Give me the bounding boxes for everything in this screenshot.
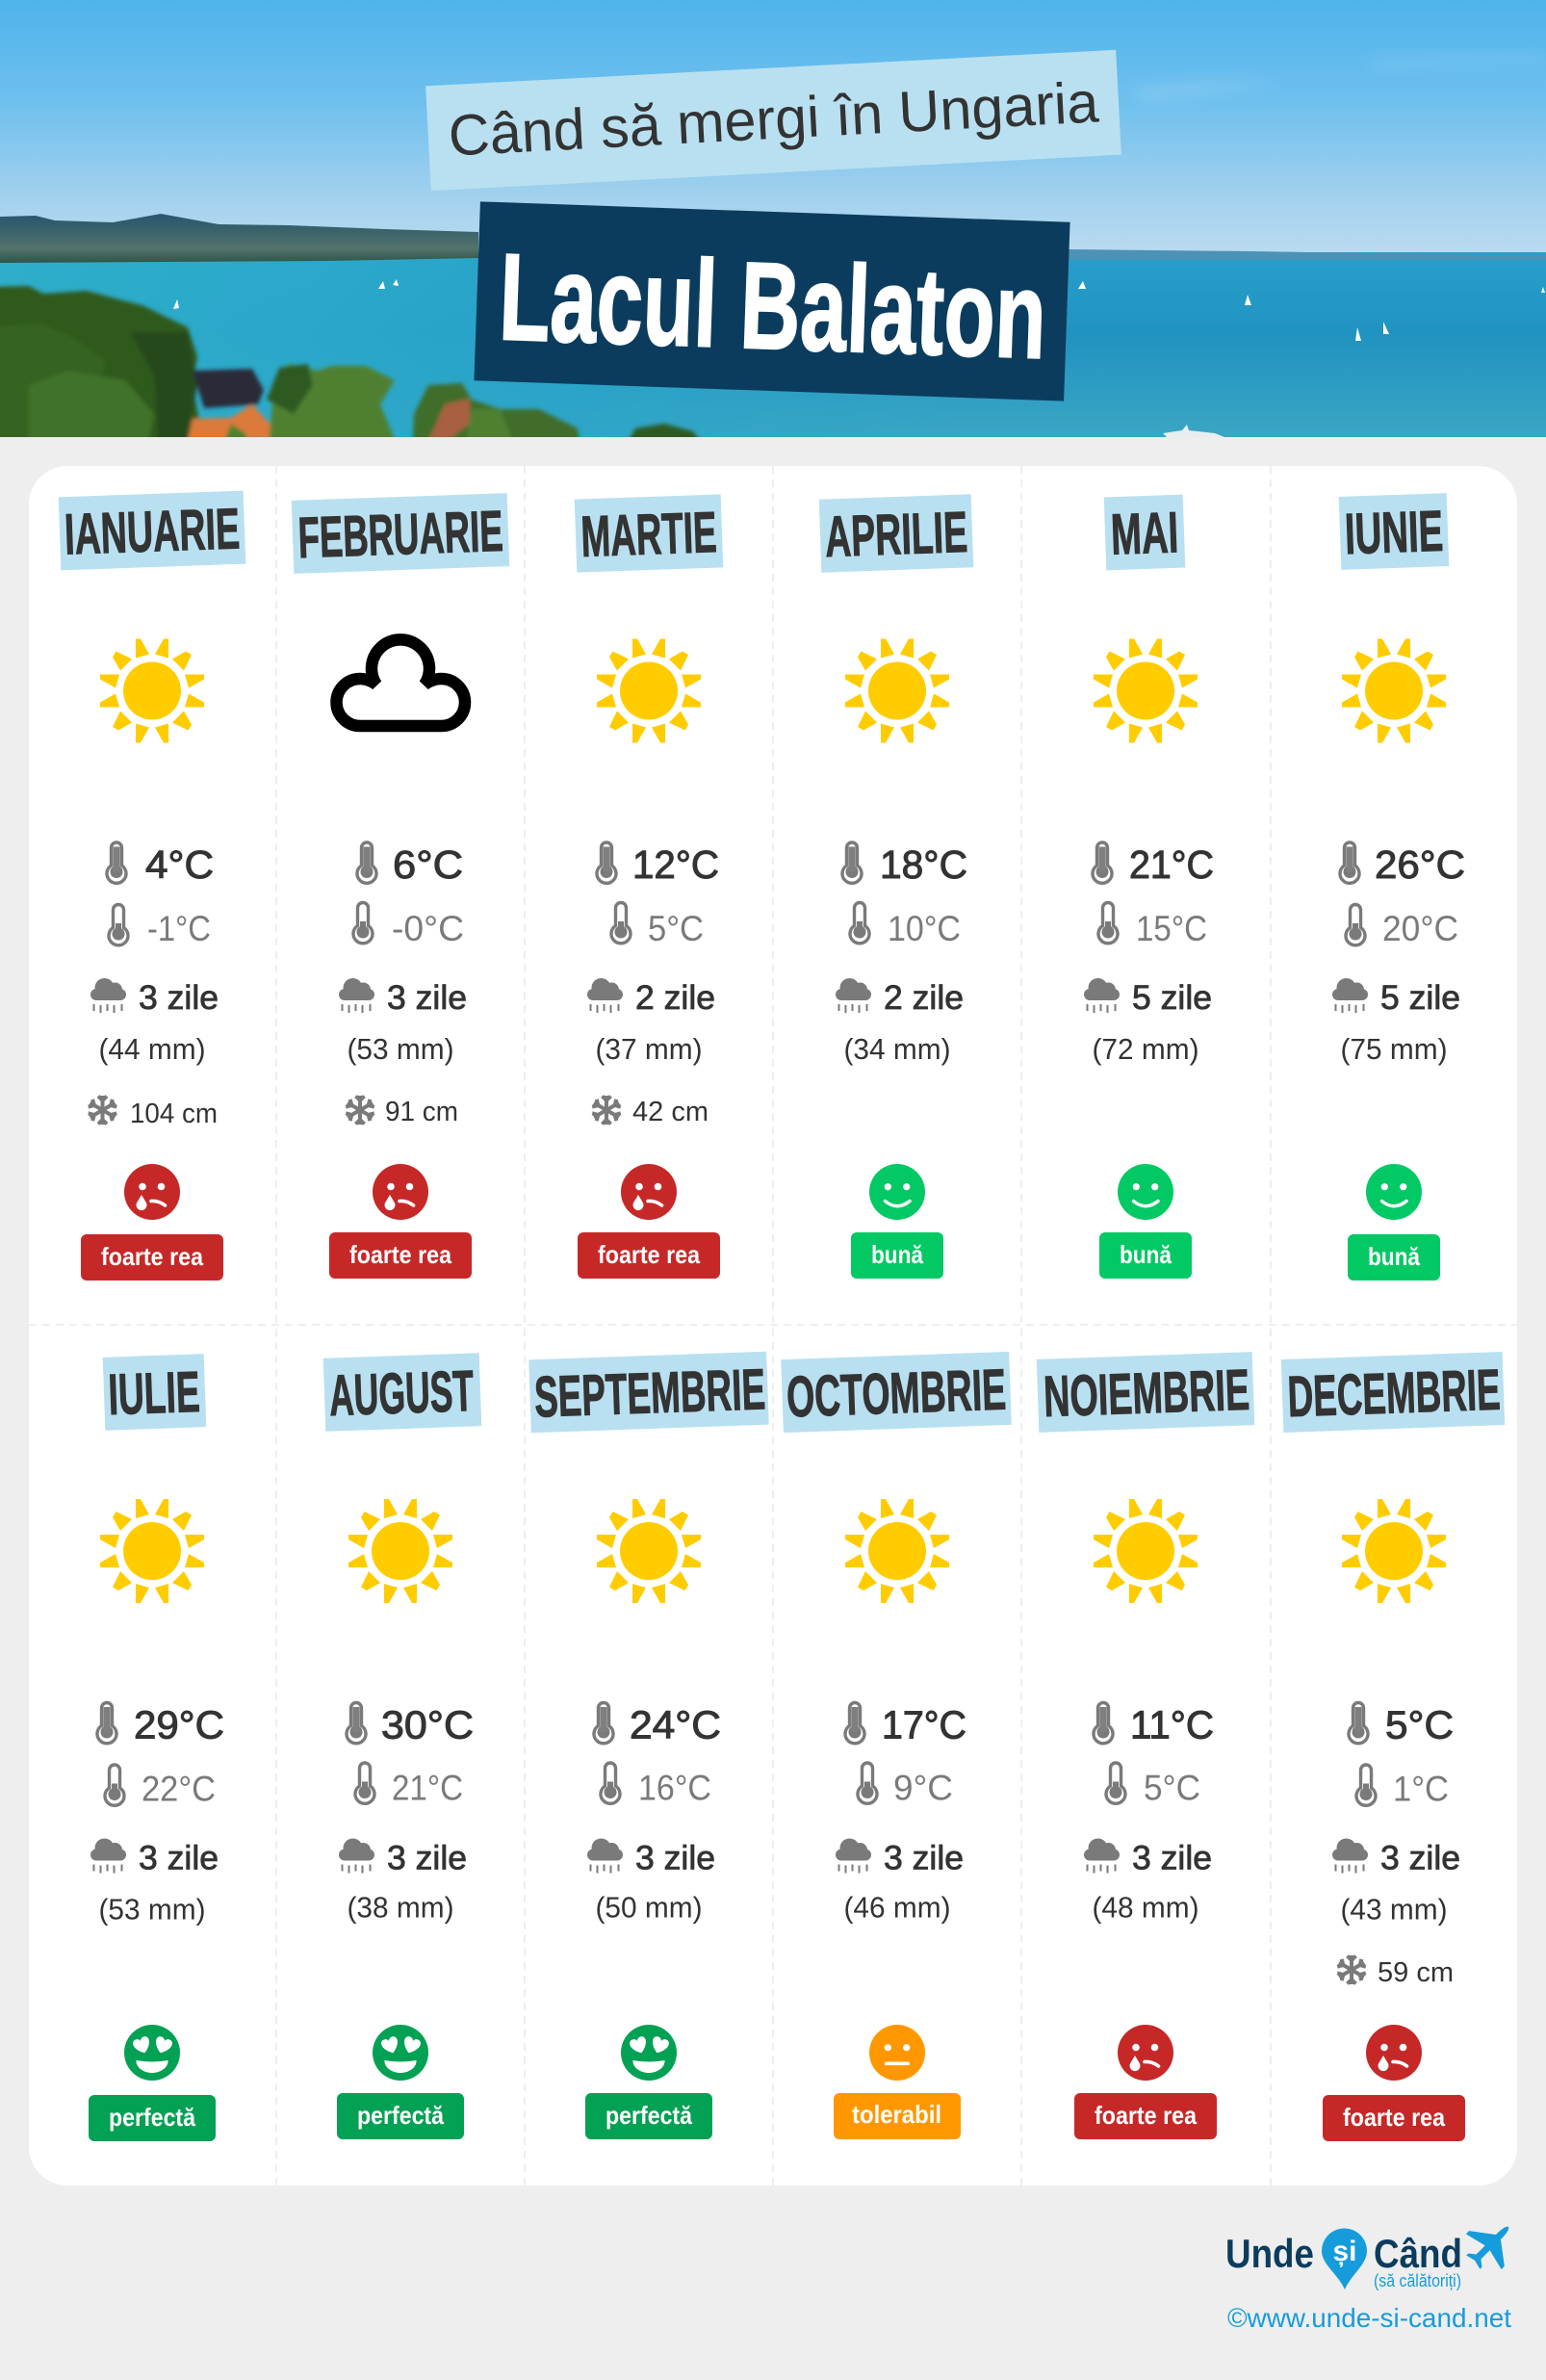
precipitation: (72 mm) [1092,1032,1199,1066]
icon: low temperature [353,903,373,944]
precipitation: (37 mm) [595,1032,703,1066]
icon: rain [1332,1839,1368,1874]
low temperature: 16°C [638,1768,711,1808]
logo word: Unde: Unde [1225,2231,1314,2276]
panel: aprilie [819,494,973,1279]
low temperature: 1°C [1393,1770,1449,1808]
website credit: ©www.unde-si-cand.net [1227,2303,1511,2333]
snowfall: 91 cm [385,1097,458,1127]
icon: high temperature [594,1702,613,1744]
low temperature: -1°C [147,909,211,948]
icon: low temperature [1098,903,1118,944]
icon: low temperature [858,1763,877,1803]
icon: airplane [1456,2210,1526,2280]
high temperature: 5°C [1385,1702,1454,1746]
icon: sad face [124,1164,180,1220]
rainy days: 3 zile [1132,1839,1212,1877]
rating badge: perfectă [109,2103,195,2132]
high temperature: 17°C [882,1702,966,1746]
icon: rain [90,1839,126,1874]
rainy days: 3 zile [635,1839,715,1877]
icon: high temperature [357,842,376,883]
icon: snow [592,1096,621,1125]
icon: snow [1337,1955,1366,1984]
icon: low temperature [105,1765,124,1805]
logo word: Când: Când [1374,2231,1462,2276]
icon: rain [836,1839,871,1874]
icon: neutral face [869,2025,925,2081]
rating badge: bună [1368,1242,1420,1271]
icon: sad face [1118,2025,1173,2081]
icon: sun [100,1499,204,1603]
high temperature: 11°C [1130,1702,1214,1746]
month label [1037,1352,1254,1433]
precipitation: (34 mm) [843,1032,951,1066]
rating badge [585,2093,712,2139]
panel: decembrie [1281,1352,1505,2141]
icon: love face [373,2025,428,2081]
month label [819,494,973,573]
precipitation: (46 mm) [843,1891,951,1924]
high temperature: 18°C [880,842,967,887]
precipitation: (50 mm) [595,1891,703,1924]
icon: sun [597,639,701,743]
rating badge [578,1232,720,1279]
icon: happy face [1118,1164,1173,1220]
month label: MAI [1110,500,1179,567]
panel: martie [575,494,723,1279]
rating badge: foarte rea [598,1240,700,1269]
icon: rain [587,1839,623,1874]
icon: low temperature [109,905,128,945]
month label: OCTOMBRIE [786,1358,1007,1429]
icon: sun [100,639,204,743]
low temperature: 21°C [392,1768,463,1808]
month label: SEPTEMBRIE [533,1357,766,1430]
icon: rain [339,978,374,1013]
rating badge [1348,1234,1440,1281]
rating badge: foarte rea [1343,2103,1445,2132]
title banner [474,201,1070,401]
panel: calendar card [29,466,1517,2186]
subtitle banner [425,50,1121,191]
month label: AUGUST [328,1358,475,1428]
rating badge [851,1232,943,1279]
logo: Unde și Când [1225,2210,1526,2290]
icon: snow [346,1096,374,1125]
icon: sun [1094,1499,1198,1603]
rainy days: 5 zile [1132,979,1212,1017]
icon: high temperature [1340,842,1359,883]
rainy days: 2 zile [635,979,715,1017]
rating badge [1074,2093,1217,2139]
rating badge [1099,1232,1192,1279]
month label: NOIEMBRIE [1043,1358,1250,1429]
rating badge: perfectă [606,2101,692,2130]
panel: februarie [292,493,509,1279]
icon: high temperature [845,1702,864,1744]
month label [1104,495,1185,570]
icon: high temperature [1094,1702,1113,1744]
low temperature: 15°C [1136,909,1207,948]
rainy days: 3 zile [139,979,219,1017]
icon: rain [1084,1839,1120,1874]
panel: iunie [1332,493,1465,1281]
rating badge [89,2095,216,2141]
icon: low temperature [355,1763,374,1803]
high temperature: 30°C [381,1702,474,1746]
icon: snow [88,1096,117,1125]
rating badge [1323,2095,1465,2141]
icon: rain [1084,978,1120,1013]
low temperature: -0°C [392,909,464,948]
subtitle banner: Când să mergi în Ungaria [447,69,1100,168]
month label: APRILIE [824,500,968,569]
low temperature: 10°C [888,909,961,948]
icon: high temperature [1093,842,1112,883]
rainy days: 2 zile [884,979,964,1017]
icon: low temperature [611,903,631,944]
icon: low temperature [850,903,869,944]
panel: ianuarie [59,491,245,1281]
precipitation: (53 mm) [98,1893,206,1926]
icon: sun [1342,1499,1446,1603]
month label [1339,493,1449,570]
icon: sun [1094,639,1198,743]
logo word: și: și [1332,2236,1357,2267]
month label [528,1352,769,1433]
panel: octombrie [781,1352,1012,2139]
icon: love face [124,2025,180,2081]
panel: iulie [89,1354,224,2141]
icon: low temperature [1356,1765,1376,1805]
logo tagline: (să călătoriți) [1374,2271,1461,2290]
rating badge: foarte rea [1095,2101,1197,2130]
icon: high temperature [1349,1702,1368,1744]
icon: sun [845,1499,949,1603]
month label: MARTIE [580,500,718,569]
rating badge: perfectă [357,2101,444,2130]
icon: sun [845,639,949,743]
low temperature: 20°C [1382,909,1458,948]
rating badge [329,1232,472,1279]
month label [59,491,245,570]
panel: septembrie [528,1352,769,2139]
hero photo: Lake Balaton [0,0,1546,462]
month label [781,1352,1012,1433]
icon: sun [597,1499,701,1603]
month label: IUNIE [1344,499,1444,566]
icon: rain [587,978,623,1013]
icon: love face [621,2025,677,2081]
icon: happy face [1366,1164,1422,1220]
low temperature: 5°C [1144,1768,1200,1808]
low temperature: 22°C [142,1770,216,1808]
month label: IANUARIE [64,496,241,567]
high temperature: 26°C [1375,842,1465,887]
rainy days: 3 zile [884,1839,964,1877]
month label [103,1354,206,1431]
high temperature: 21°C [1129,842,1214,887]
low temperature: 5°C [648,909,704,948]
month label: IULIE [107,1359,201,1427]
snowfall: 59 cm [1378,1957,1454,1988]
icon: rain [836,978,871,1013]
rainy days: 3 zile [139,1839,219,1877]
panel: noiembrie [1037,1352,1254,2139]
rainy days: 3 zile [387,1839,467,1877]
precipitation: (43 mm) [1340,1893,1448,1926]
rating badge [337,2093,464,2139]
icon: low temperature [1106,1763,1125,1803]
rating badge: tolerabil [852,2100,941,2129]
precipitation: (48 mm) [1092,1891,1199,1924]
icon: map pin [1322,2228,1367,2289]
snowfall: 104 cm [130,1099,218,1129]
icon: rain [1332,978,1368,1013]
month label [292,493,509,574]
rating badge: foarte rea [349,1240,451,1269]
icon: sad face [621,1164,677,1220]
rating badge [834,2093,961,2139]
rainy days: 3 zile [387,979,467,1017]
icon: cloud [337,639,465,726]
panel: mai [1084,495,1214,1279]
icon: rain [339,1839,374,1874]
high temperature: 12°C [632,842,719,887]
high temperature: 24°C [630,1702,721,1746]
title banner: Lacul Balaton [497,228,1048,385]
panel: august [323,1353,481,2139]
icon: high temperature [597,842,616,883]
icon: sun [1342,639,1446,743]
month label: FEBRUARIE [296,499,504,570]
icon: sun [348,1499,452,1603]
month label [323,1353,481,1432]
snowfall: 42 cm [632,1097,709,1127]
icon: high temperature [347,1702,366,1744]
precipitation: (75 mm) [1340,1032,1448,1066]
rating badge [81,1234,223,1281]
low temperature: 9°C [893,1768,953,1808]
precipitation: (44 mm) [98,1032,206,1066]
icon: sad face [1366,2025,1422,2081]
precipitation: (38 mm) [347,1891,454,1924]
icon: low temperature [601,1763,620,1803]
rainy days: 5 zile [1380,979,1460,1017]
high temperature: 6°C [393,842,463,887]
high temperature: 29°C [134,1702,224,1746]
icon: high temperature [842,842,862,883]
rating badge: foarte rea [101,1242,203,1271]
icon: rain [90,978,126,1013]
rainy days: 3 zile [1380,1839,1460,1877]
icon: high temperature [107,842,126,883]
precipitation: (53 mm) [347,1032,454,1066]
high temperature: 4°C [145,842,214,887]
icon: high temperature [97,1702,116,1744]
icon: happy face [869,1164,925,1220]
rating badge: bună [1120,1240,1172,1269]
month label [575,494,723,573]
icon: sad face [373,1164,428,1220]
rating badge: bună [871,1240,923,1269]
icon: low temperature [1346,905,1365,945]
